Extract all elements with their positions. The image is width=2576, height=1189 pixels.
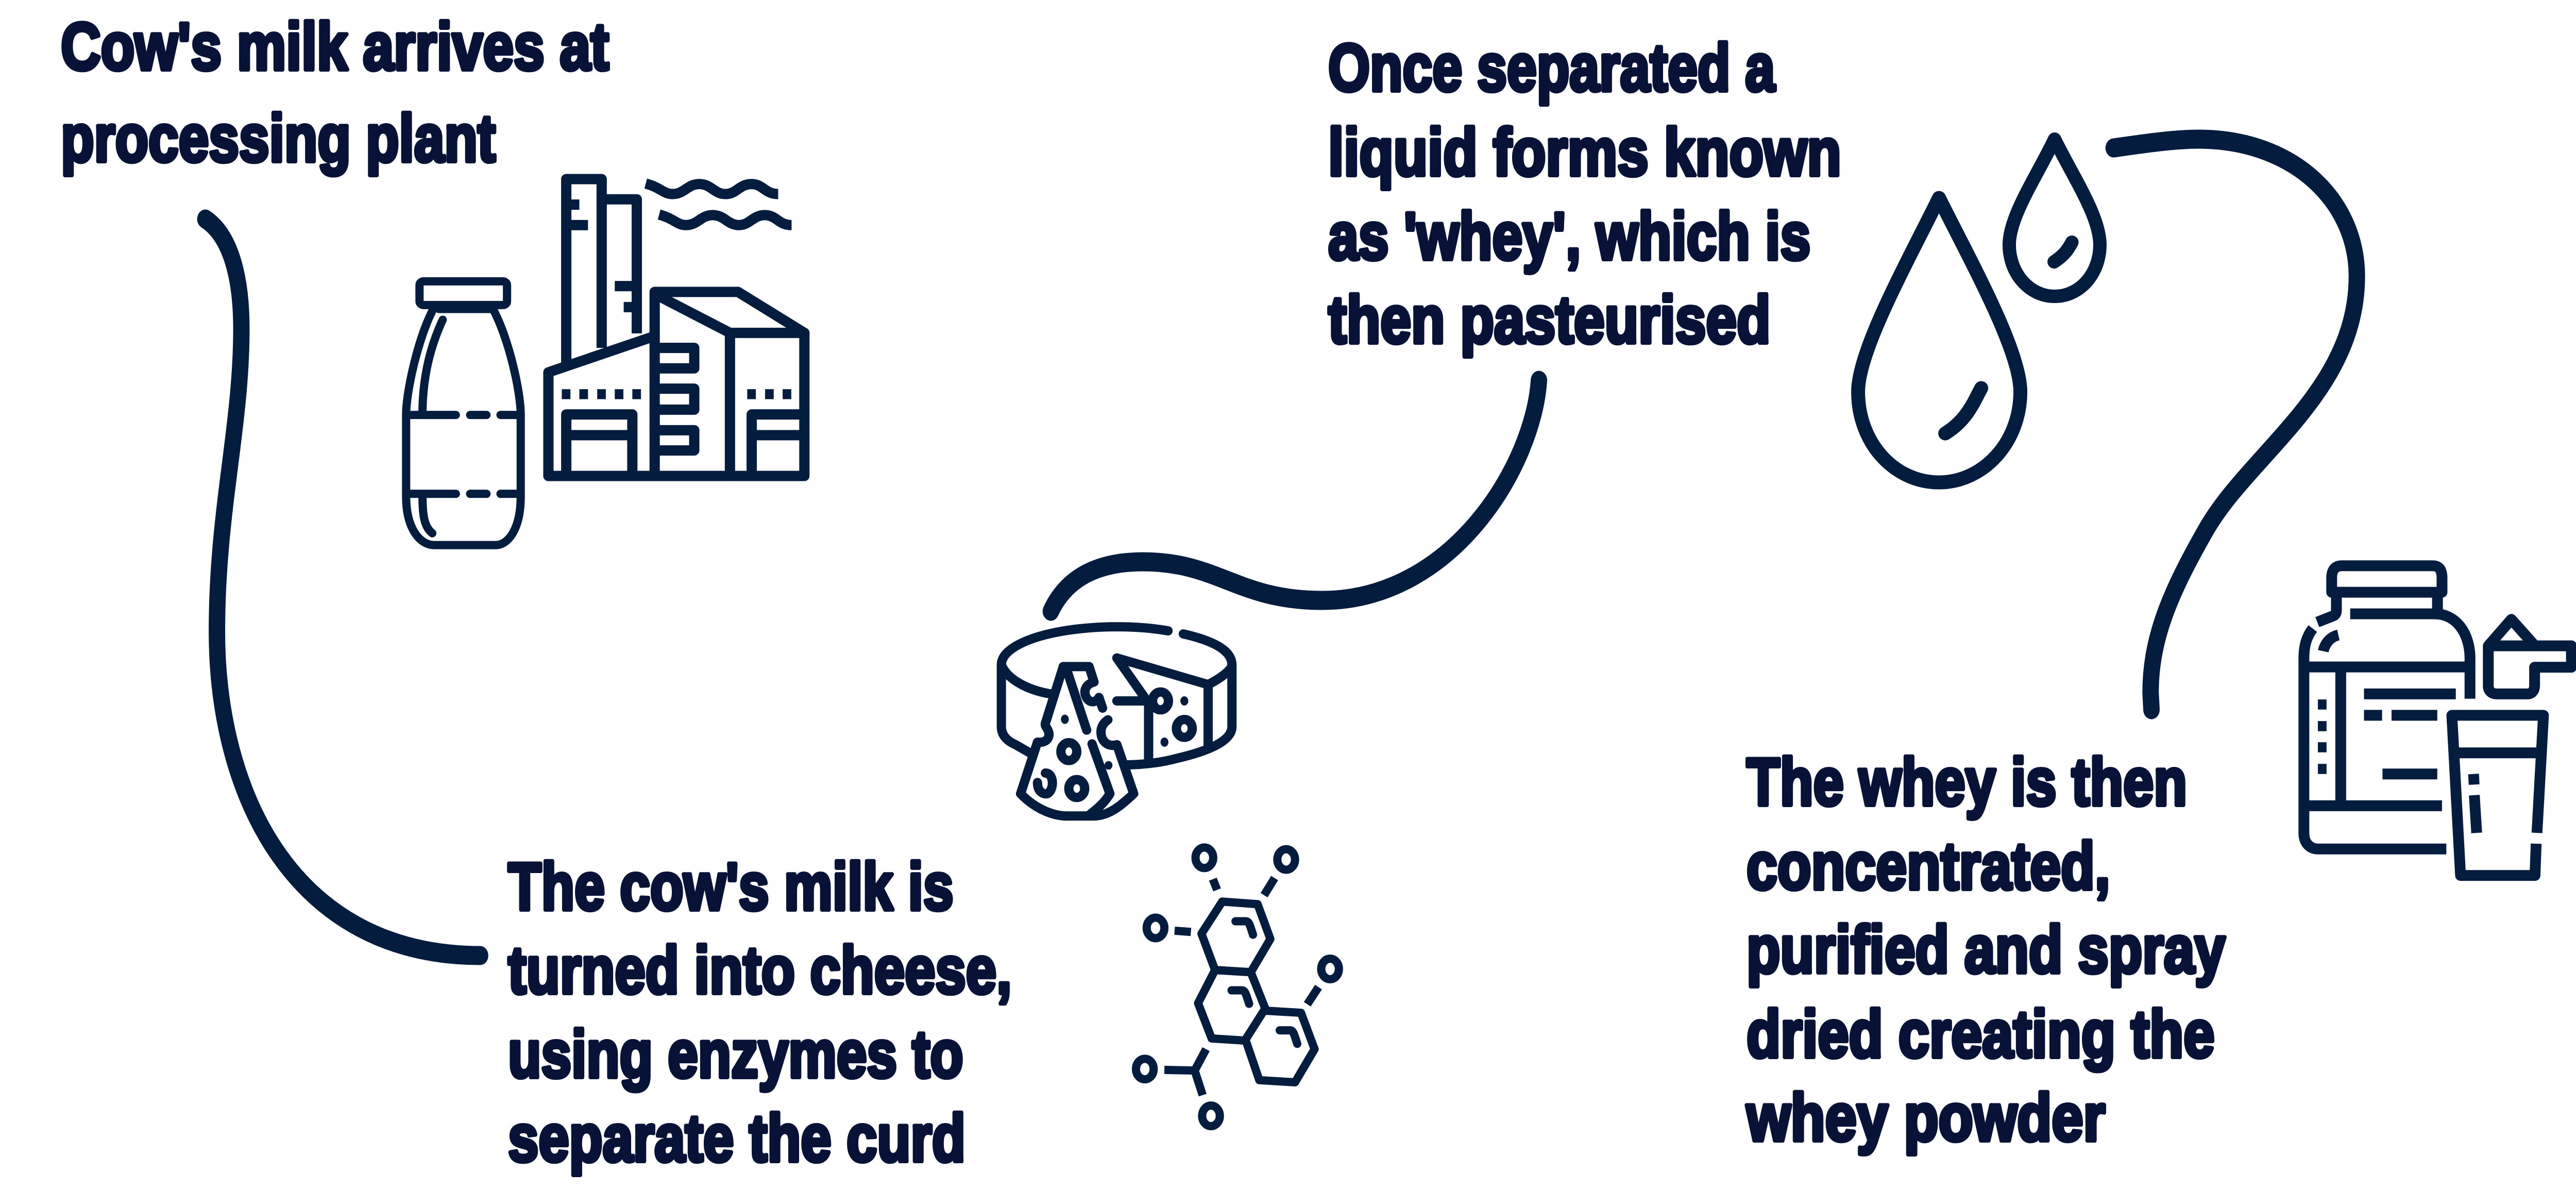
text: step 4 whey powder: purified and spray	[1747, 912, 2225, 987]
text: step 3 whey pasteurised: as 'whey', which is	[1328, 198, 1810, 274]
scoop	[2488, 619, 2571, 694]
text: step 1 milk arrives	[61, 9, 609, 176]
text: step 1 milk arrives: Cow's milk arrives at	[61, 9, 609, 84]
icon: cheese	[1002, 627, 1232, 816]
arrow: curve from step 1 to step 2	[206, 219, 480, 956]
text: step 1 milk arrives: processing plant	[61, 101, 496, 176]
arrow: curve from step 3 to step 4	[2114, 139, 2357, 710]
text: step 2 cheese	[508, 849, 1012, 1176]
text: step 2 cheese: turned into cheese,	[508, 932, 1012, 1008]
icon: protein powder jar, scoop and glass	[2304, 566, 2571, 876]
text: step 4 whey powder: dried creating the	[1747, 996, 2215, 1071]
text: step 3 whey pasteurised: liquid forms known	[1328, 114, 1841, 190]
icon: factory	[548, 179, 804, 476]
icon: molecule	[1136, 847, 1339, 1126]
icon: large drop	[1858, 198, 2020, 482]
text: step 4 whey powder: whey powder	[1746, 1080, 2105, 1155]
text: step 4 whey powder: concentrated,	[1747, 828, 2110, 903]
text: step 2 cheese: The cow's milk is	[508, 849, 954, 924]
text: step 4 whey powder	[1746, 744, 2225, 1155]
text: step 2 cheese: using enzymes to	[508, 1016, 963, 1092]
jar	[2304, 566, 2470, 849]
icon: milk bottle	[406, 281, 521, 545]
arrow: curve from step 2 to step 3	[1051, 380, 1539, 611]
icon: small drop	[2009, 139, 2100, 296]
text: step 4 whey powder: The whey is then	[1747, 744, 2187, 819]
text: step 3 whey pasteurised	[1328, 30, 1841, 357]
text: step 3 whey pasteurised: Once separated a	[1328, 30, 1775, 105]
text: step 3 whey pasteurised: then pasteurised	[1328, 282, 1771, 357]
glass	[2452, 715, 2544, 876]
text: step 2 cheese: separate the curd	[508, 1100, 965, 1176]
